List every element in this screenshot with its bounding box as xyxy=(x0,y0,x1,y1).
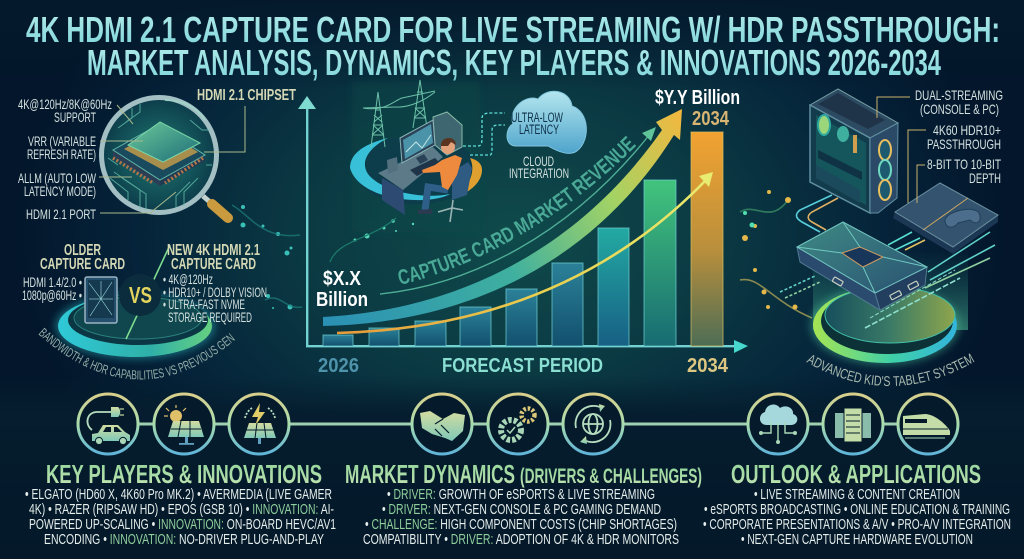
panel: outlook and applications xyxy=(703,459,1011,548)
icon: power pylons xyxy=(363,80,435,147)
icon: cracked tablet xyxy=(85,277,117,323)
panel: HDMI 2.1 chipset magnifier xyxy=(18,87,296,222)
label: ultra-low latency xyxy=(511,110,563,137)
large growth arrow xyxy=(323,109,682,326)
label: cloud integration xyxy=(509,153,569,181)
heading: (DRIVERS & CHALLENGES) xyxy=(520,465,702,488)
heading: older capture card: CAPTURE CARD xyxy=(40,256,125,273)
label: ALLM xyxy=(18,170,97,199)
panel: market revenue chart xyxy=(298,87,748,377)
divider xyxy=(126,245,170,339)
VS badge: VS xyxy=(129,282,152,308)
label: VRR: VRR (VARIABLE xyxy=(28,133,96,149)
caption: advanced tablet system: ADVANCED KID'S TABLET SYSTEM xyxy=(806,354,974,386)
older card specs xyxy=(22,274,82,303)
panel: advanced system xyxy=(780,87,1003,386)
callout leader lines xyxy=(877,97,926,203)
label: 4K support: SUPPORT xyxy=(54,109,96,125)
panel: older vs new capture card xyxy=(22,242,267,380)
icon: EV charging xyxy=(78,394,138,454)
icon: computer desk xyxy=(378,112,462,215)
heading: new capture card: NEW 4K HDMI 2.1 xyxy=(167,242,260,259)
icon: circuit traces xyxy=(108,100,212,210)
panel: market dynamics xyxy=(345,459,702,548)
platform ring xyxy=(810,285,960,365)
label: HDR10 passthrough: 4K60 HDR10+ xyxy=(933,122,1001,138)
new card specs: STORAGE REQUIRED xyxy=(168,309,252,325)
icon: high-speed train xyxy=(898,394,958,454)
new card specs xyxy=(163,271,267,325)
body text: POWERED UP-SCALING • INNOVATION: ON-BOARD HEVC/AV1 xyxy=(29,517,336,533)
body text xyxy=(363,487,679,548)
icon: magnifying glass handle xyxy=(203,196,228,218)
label: HDMI port: HDMI 2.1 PORT xyxy=(26,206,96,222)
platform beam xyxy=(813,250,968,330)
caption: bandwidth: BANDWIDTH & HDR CAPABILITIES VS PREVIOUS GEN xyxy=(38,328,235,380)
title xyxy=(26,9,1000,83)
heading: MARKET DYNAMICS xyxy=(345,459,515,489)
body text: • DRIVER: NEXT-GEN CONSOLE & PC GAMING DEMAND xyxy=(382,502,661,518)
axis label forecast period: FORECAST PERIOD xyxy=(442,355,603,377)
label: 4K support xyxy=(18,96,112,125)
decorative particles xyxy=(330,218,414,262)
icon: cloud network xyxy=(748,394,808,454)
icon: cloud xyxy=(507,91,586,153)
panel: key players and innovations xyxy=(25,459,336,548)
value: start: Billion xyxy=(316,289,368,311)
heading: older capture card xyxy=(40,242,125,273)
older card specs: HDMI 1.4/2.0 • xyxy=(23,274,82,290)
new card specs: • 4K@120Hz xyxy=(163,271,213,287)
decorative data particles left xyxy=(232,205,302,310)
icon: gears xyxy=(488,394,548,454)
icon: game console xyxy=(893,183,998,254)
VS badge xyxy=(119,274,161,316)
icon: server racks xyxy=(823,394,883,454)
label: VRR: REFRESH RATE) xyxy=(27,146,96,162)
axis label 2034: 2034 xyxy=(687,355,729,377)
value: start xyxy=(316,268,368,311)
heading: older capture card: OLDER xyxy=(64,242,101,259)
body text xyxy=(703,487,1011,548)
label: ALLM: ALLM (AUTO LOW xyxy=(18,170,97,186)
body text: 4K) • RAZER (RIPSAW HD) • EPOS (GSB 10) • INNOVATION: AI- xyxy=(29,502,334,518)
icon: magnifying glass lens xyxy=(102,98,216,212)
label: cloud integration: CLOUD xyxy=(523,153,554,169)
icon: gaming PC tower xyxy=(810,89,898,213)
thin yellow trend arrow xyxy=(337,172,713,333)
body text: COMPATIBILITY • DRIVER: ADOPTION OF 4K & HDR MONITORS xyxy=(363,532,679,548)
label: cloud integration: INTEGRATION xyxy=(509,165,569,181)
icon: person in chair xyxy=(418,138,472,222)
label leader lines xyxy=(99,105,245,213)
body text: • DRIVER: GROWTH OF eSPORTS & LIVE STREAMING xyxy=(387,487,655,503)
bottom band xyxy=(0,375,1024,559)
heading: new capture card: CAPTURE CARD xyxy=(171,256,256,273)
label: chipset: HDMI 2.1 CHIPSET xyxy=(197,87,296,104)
label: bit depth: DEPTH xyxy=(969,170,1001,186)
axis label 2026: 2026 xyxy=(318,355,359,377)
older card specs: 1080p@60Hz • xyxy=(22,287,82,303)
bar label 2034: 2034 xyxy=(692,108,730,130)
chart axes xyxy=(298,96,748,353)
heading: KEY PLAYERS & INNOVATIONS xyxy=(46,459,322,489)
body text: • CHALLENGE: HIGH COMPONENT COSTS (CHIP SHORTAGES) xyxy=(365,517,677,533)
thin arrow along label xyxy=(380,127,656,294)
icon row connector xyxy=(108,422,928,426)
platform ring xyxy=(55,293,215,359)
bar chart xyxy=(323,132,723,346)
value: end: $Y.Y Billion xyxy=(655,87,740,109)
panel: streamer illustration xyxy=(330,80,586,262)
new card specs: • ULTRA-FAST NVME xyxy=(163,296,245,312)
illustration backdrop xyxy=(352,82,480,232)
new card specs: • HDR10+ / DOLBY VISION xyxy=(163,284,267,300)
body text: ENCODING • INNOVATION: NO-DRIVER PLUG-AND-PLAY xyxy=(44,532,324,548)
label: VRR xyxy=(27,133,96,162)
curved label: capture card market revenue: CAPTURE CARD MARKET REVENUE xyxy=(398,136,636,284)
label: dual streaming xyxy=(915,87,1003,117)
decorative data particles right xyxy=(740,190,812,318)
icon: handshake xyxy=(412,394,472,454)
label: ultra-low latency: ULTRA-LOW xyxy=(511,110,563,125)
icon: capture card xyxy=(797,222,927,310)
value: start: $X.X xyxy=(323,268,362,290)
body text xyxy=(25,487,336,548)
heading: new capture card xyxy=(167,242,260,273)
icon: globe cycle xyxy=(563,394,623,454)
data link to cloud xyxy=(463,113,505,155)
label: HDR10 passthrough xyxy=(927,122,1001,152)
icon: solar energy cycle xyxy=(229,394,289,454)
label: ALLM: LATENCY MODE) xyxy=(24,183,96,199)
cables xyxy=(780,195,995,328)
label: bit depth xyxy=(927,156,1001,186)
desk glow ring xyxy=(350,136,482,204)
icon: microchip xyxy=(113,122,205,186)
body text: • ELGATO (HD60 X, 4K60 Pro MK.2) • AVERMEDIA (LIVE GAMER xyxy=(25,487,332,503)
top band xyxy=(0,0,1024,90)
icon: solar panel xyxy=(154,394,214,454)
label: 4K support: 4K@120Hz/8K@60Hz xyxy=(18,96,112,112)
label: ultra-low latency: LATENCY xyxy=(519,122,559,137)
